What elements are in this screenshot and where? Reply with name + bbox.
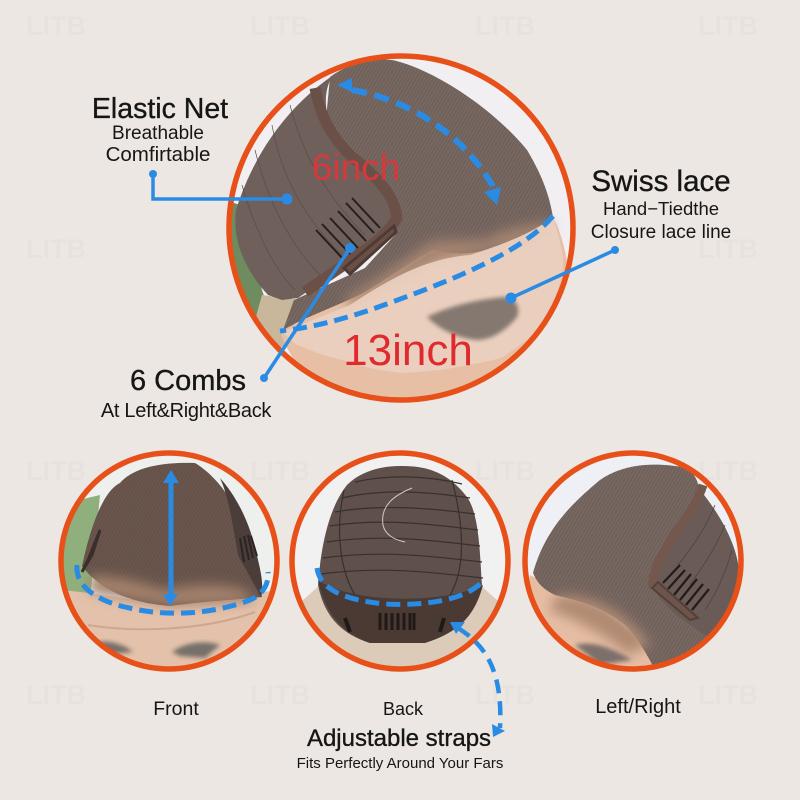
net lines [242,105,365,290]
heading: Adjustable straps: Adjustable straps [307,725,491,752]
6inch label: 6inch [312,147,400,188]
watermarks [26,11,758,710]
main wig photo circle [225,56,573,410]
label: Front: Front [153,698,199,720]
label: Left/Right: Left/Right [595,696,681,718]
hairline glow [90,575,255,606]
skin [280,217,569,410]
skin [530,575,652,666]
bottom band [318,580,483,643]
eyebrow [427,297,518,340]
cap [82,463,262,606]
heading: Swiss lace [591,165,731,243]
orange ring [292,453,508,669]
heading: Swiss lace: Hand−Tiedthe [603,198,719,219]
hair [302,586,498,666]
side view circle [525,453,741,680]
eyebrows [98,642,133,655]
heading: 6 Combs: 6 Combs [130,365,246,397]
heading: Elastic Net [92,93,228,166]
elastic net [235,76,398,300]
heading: Elastic Net: Elastic Net [92,93,228,125]
comb [380,613,414,630]
blond hair [256,295,296,348]
heading: 6 Combs [101,365,272,422]
double arrow [163,470,179,606]
lace panel [283,60,553,330]
front view circle [58,453,285,680]
heading: Adjustable straps: Fits Perfectly Around Your Fars [297,755,503,772]
13inch label: 13inch [343,326,473,375]
dashed line: back [317,568,482,604]
net seam [305,88,397,292]
orange ring [61,453,277,669]
heading: Swiss lace: Closure lace line [591,222,731,243]
orange ring [525,453,741,669]
lace [533,464,707,664]
hairline glow [345,222,555,308]
dashed line: front [77,565,268,613]
orange ring [229,56,573,400]
heading: Swiss lace: Swiss lace [591,165,731,198]
heading: 6 Combs: At Left&Right&Back [101,400,272,422]
dark side net [220,478,262,597]
comb [663,565,709,610]
dashed line: 13 inch [280,216,553,331]
hairline glow [550,595,650,655]
comb [316,198,380,260]
cap [318,466,482,643]
heading: Elastic Net: Breathable [112,123,204,144]
heading: Adjustable straps [297,725,503,772]
green background [232,202,264,316]
lower hair [292,358,353,390]
back view circle [290,453,520,680]
callout line: Swiss lace [506,246,619,304]
heading: Elastic Net: Comfirtable [106,143,210,166]
cap lines [321,477,483,595]
skin [68,590,270,666]
dashed arrow: 6 inch [337,78,501,205]
comb [240,535,257,562]
lace edge [283,217,563,373]
callout line: 6 Combs [260,243,355,382]
callout line: Elastic Net [149,170,292,204]
net [653,490,739,637]
label: Back: Back [383,699,424,719]
dashed arrow: adjustable straps [450,622,505,737]
